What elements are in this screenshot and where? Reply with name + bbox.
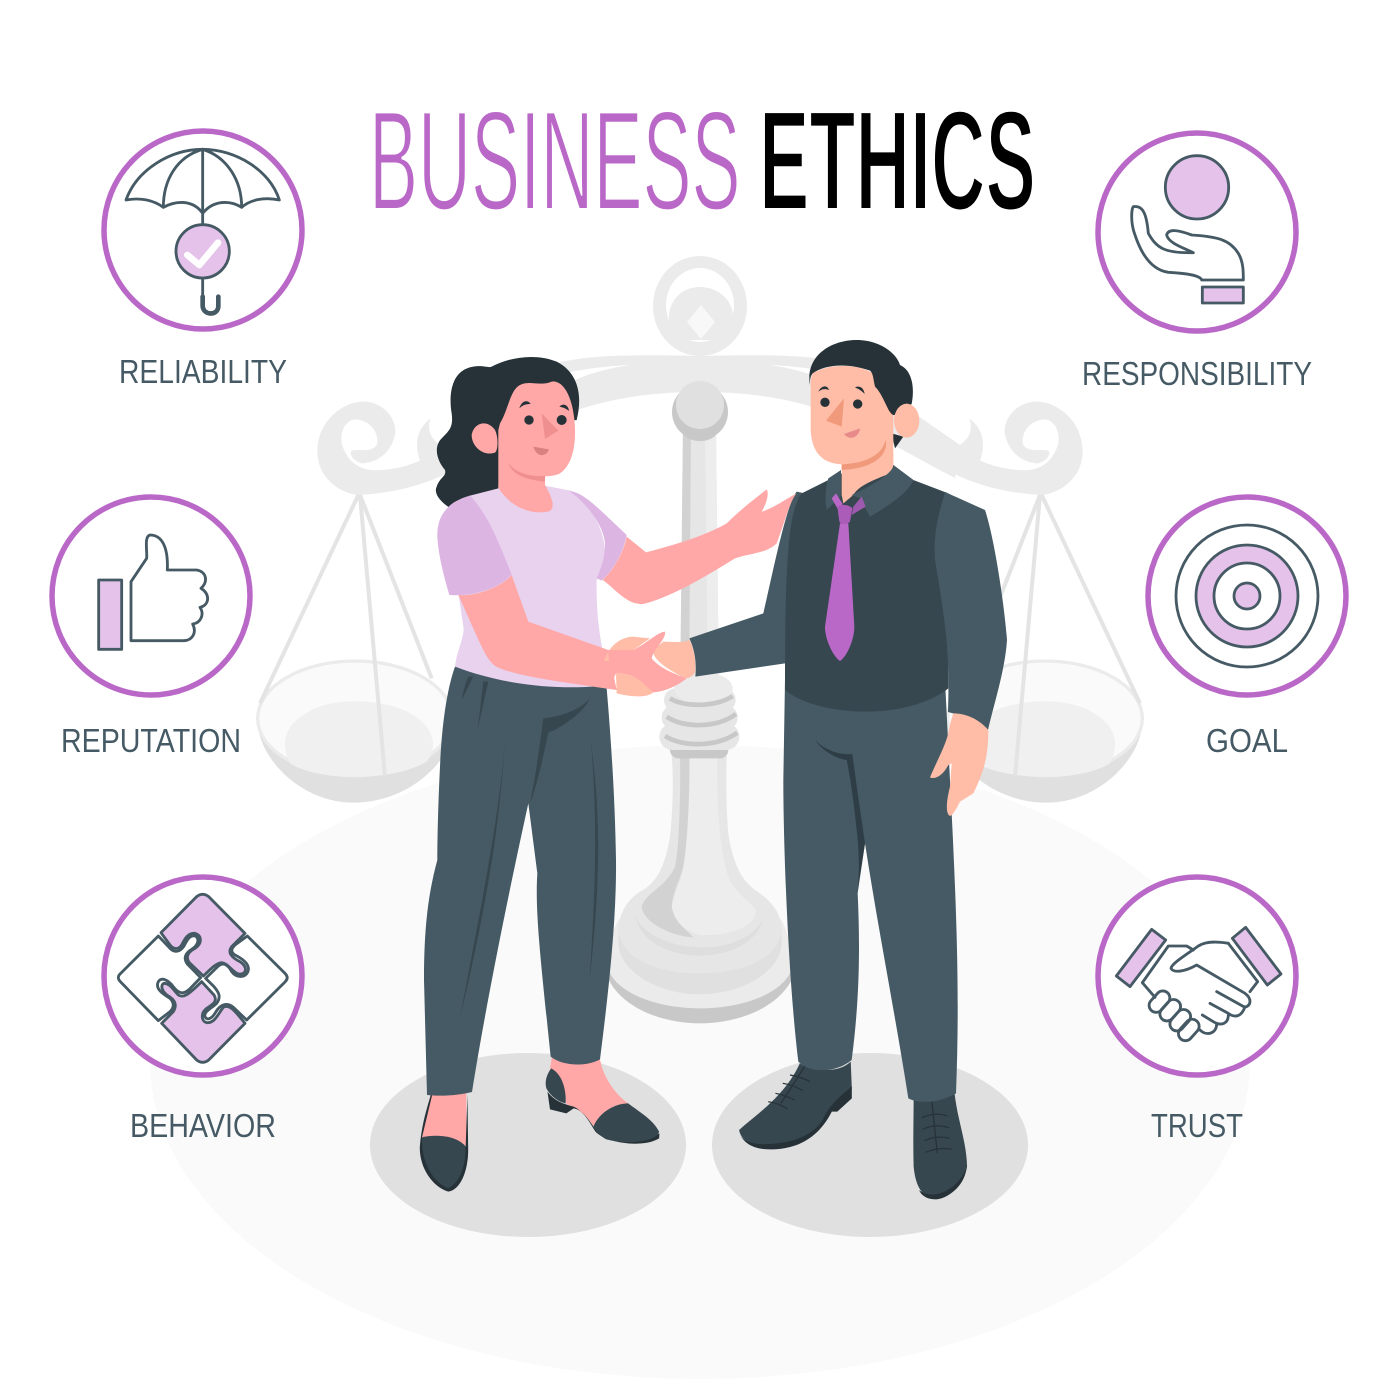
- man face: [811, 366, 893, 464]
- left pan bowl: [257, 718, 453, 803]
- woman eyes and brows: [519, 401, 569, 425]
- reputation label: REPUTATION: [61, 722, 241, 759]
- woman raised arm and hand: [603, 489, 797, 604]
- woman neck and face: [498, 382, 575, 490]
- right back string: [968, 495, 1040, 678]
- scale beam: [440, 355, 960, 478]
- woman figure: [420, 357, 797, 1192]
- woman ear: [472, 423, 497, 454]
- man shoes: [739, 1062, 967, 1199]
- woman right shoe: [546, 1068, 659, 1144]
- man's thumb: [604, 637, 650, 661]
- icon: target: [1176, 525, 1318, 667]
- man upper body: [689, 340, 948, 712]
- panel: behavior: [104, 877, 302, 1144]
- right pan bowl: [947, 718, 1143, 803]
- title word: ethics: ETHICS: [759, 81, 1036, 241]
- woman mouth: [533, 447, 549, 455]
- woman jaw shadow: [508, 463, 545, 482]
- panel: reliability: [104, 131, 302, 390]
- responsibility ring: [1098, 133, 1296, 331]
- woman feet and shoes: [420, 1053, 659, 1192]
- left pan rim: [258, 661, 452, 776]
- man jaw shadow: [842, 440, 886, 470]
- title word: business: BUSINESS: [369, 81, 740, 239]
- right pan rim: [948, 661, 1142, 776]
- reputation ring: [52, 497, 250, 695]
- woman nose: [542, 413, 558, 439]
- man figure: [689, 340, 1007, 1199]
- behavior ring: [104, 877, 302, 1075]
- woman left foot: [422, 1087, 466, 1147]
- justice scales: [257, 256, 1143, 1023]
- man hair: [809, 340, 913, 415]
- man hair back: [892, 433, 903, 448]
- woman hair: [436, 357, 579, 515]
- icon: hand holding circle: [1132, 156, 1243, 303]
- man right hand: [930, 713, 988, 816]
- left scroll: [317, 402, 447, 495]
- right pan inner: [967, 701, 1115, 777]
- behavior label: BEHAVIOR: [130, 1107, 276, 1144]
- panel: goal: [1148, 497, 1346, 759]
- man eyes and brows: [818, 386, 865, 409]
- panel: trust: [1098, 877, 1296, 1144]
- trust label: TRUST: [1151, 1107, 1243, 1144]
- woman's hand in handshake: [608, 632, 687, 692]
- icon: handshake: [1116, 927, 1281, 1044]
- woman right sleeve: [568, 491, 627, 581]
- man right shoe: [913, 1092, 967, 1199]
- icon: puzzle: [118, 894, 287, 1062]
- scale top ring: [653, 256, 747, 356]
- man collar right: [852, 465, 913, 517]
- woman T-shirt: [440, 486, 607, 687]
- woman left shoe: [420, 1092, 468, 1192]
- goal label: GOAL: [1206, 722, 1288, 759]
- man sleeve: [689, 492, 820, 677]
- icon: thumbs up: [99, 535, 208, 649]
- necktie: [825, 493, 866, 661]
- background floor ellipse: [150, 745, 1250, 1379]
- floor shadow under man: [712, 1053, 1028, 1237]
- panel: responsibility: [1082, 133, 1312, 392]
- scale base and knot: [607, 672, 793, 1023]
- scale column: [672, 381, 728, 700]
- man's lower fingers: [616, 673, 653, 696]
- woman upper body: [436, 357, 797, 696]
- title: [369, 81, 1036, 241]
- woman neckline skin: [498, 485, 553, 512]
- panel: reputation: [52, 497, 250, 759]
- woman forearm: [458, 575, 617, 690]
- man vest: [785, 465, 948, 712]
- man mouth: [844, 428, 860, 438]
- right scroll: [953, 402, 1083, 495]
- reliability label: RELIABILITY: [119, 353, 287, 390]
- left scroll and pan: [257, 402, 453, 803]
- icon: umbrella with check: [126, 149, 279, 313]
- man neck: [842, 453, 893, 503]
- man trousers: [783, 680, 958, 1102]
- left back string: [360, 495, 432, 678]
- reliability ring: [104, 131, 302, 329]
- woman trousers: [424, 667, 616, 1096]
- woman left sleeve: [437, 496, 512, 595]
- left front strings: [260, 495, 385, 777]
- left pan inner: [285, 701, 433, 777]
- man's hand in handshake: [653, 640, 695, 678]
- trust ring: [1098, 877, 1296, 1075]
- man left shoe: [739, 1062, 852, 1149]
- right scroll and pan: [947, 402, 1143, 803]
- man collar left: [826, 470, 841, 510]
- floor shadow under woman: [370, 1053, 686, 1237]
- man nose: [826, 398, 844, 427]
- goal ring: [1148, 497, 1346, 695]
- man ear: [894, 404, 919, 438]
- man right arm: [935, 492, 1007, 730]
- responsibility label: RESPONSIBILITY: [1082, 355, 1312, 392]
- woman right foot: [550, 1053, 628, 1126]
- right front strings: [1015, 495, 1140, 777]
